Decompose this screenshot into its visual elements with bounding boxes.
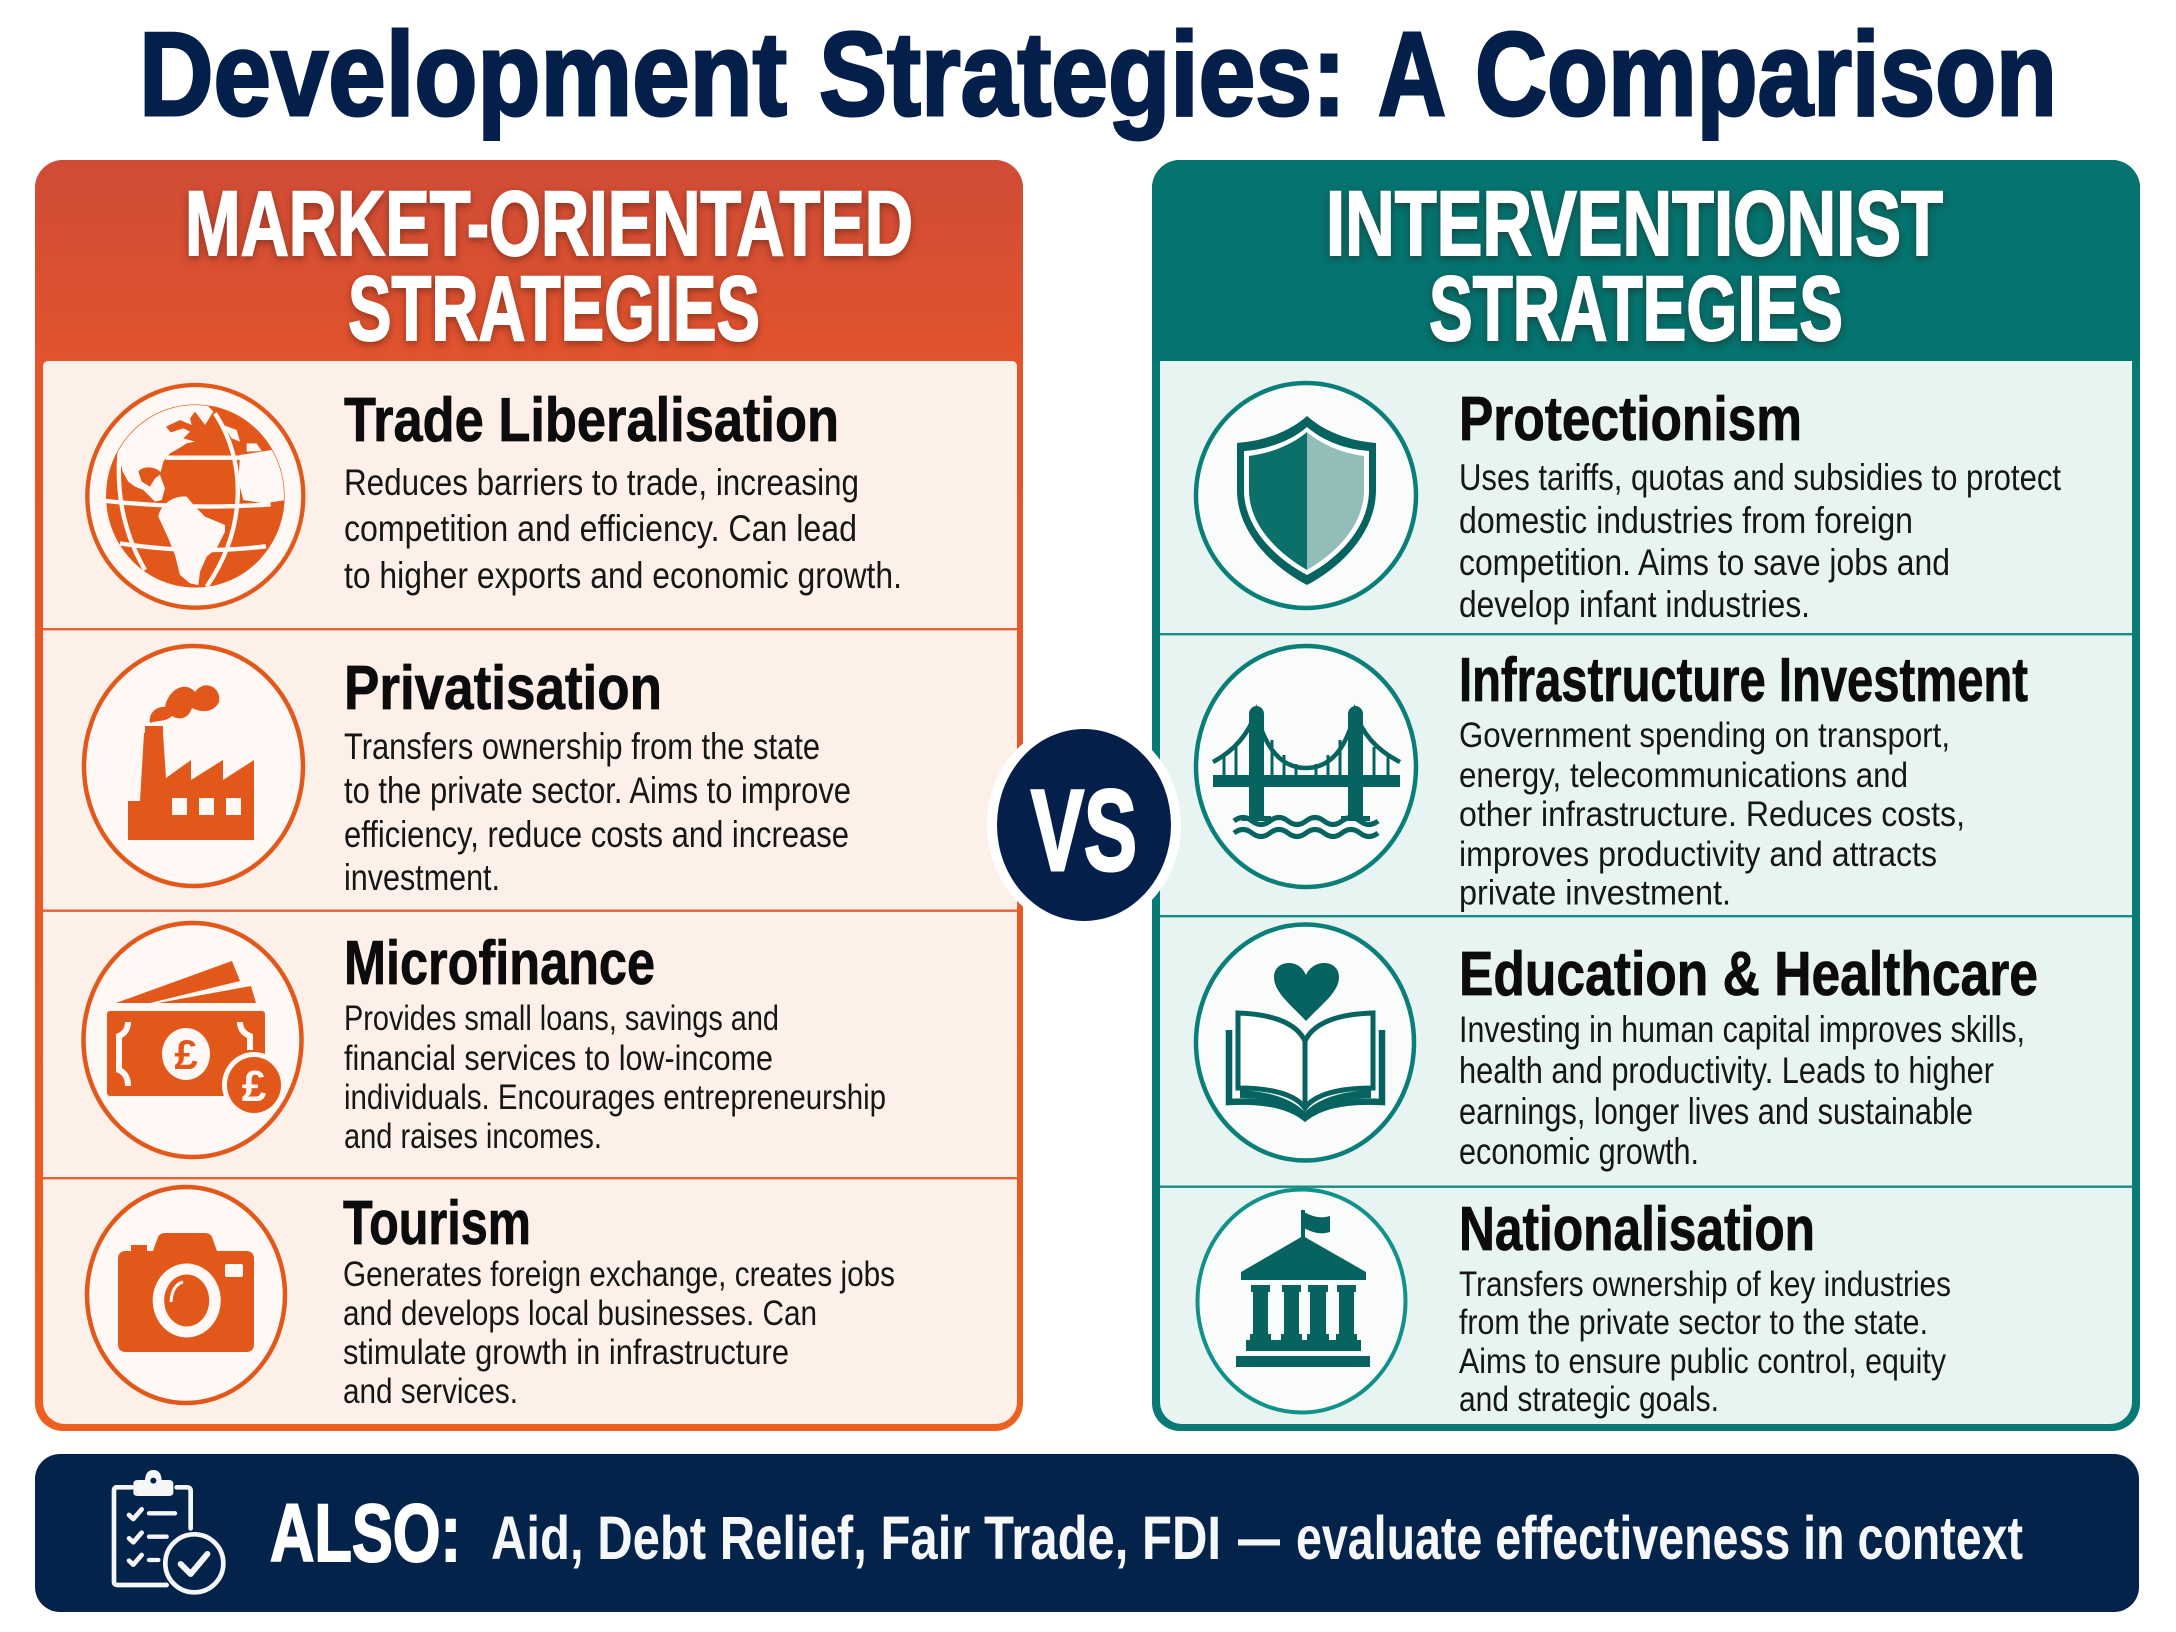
row: trade liberalisation (87, 385, 902, 608)
description: economic growth. (1459, 1131, 1699, 1172)
icon: banknotes and coin (84, 923, 302, 1157)
VS badge (987, 720, 1181, 930)
description: Reduces barriers to trade, increasing (344, 462, 859, 503)
row: nationalisation (1198, 1190, 1951, 1419)
description: Provides small loans, savings and (344, 999, 779, 1038)
title: Strategies: (819, 8, 1346, 141)
description: improves productivity and attracts (1459, 835, 1937, 874)
description: Uses tariffs, quotas and subsidies to protect (1459, 457, 2062, 498)
panel heading: STRATEGIES (348, 258, 760, 360)
description: and raises incomes. (344, 1117, 602, 1156)
icon: shield (1196, 383, 1416, 608)
panel: market-orientated strategies (35, 160, 1023, 1431)
icon: suspension bridge (1196, 646, 1416, 887)
heading: Microfinance (344, 929, 655, 998)
VS badge: VS (1031, 767, 1137, 895)
banner text: — (1238, 1504, 1280, 1572)
description: develop infant industries. (1459, 584, 1810, 625)
heading: Education & Healthcare (1459, 940, 2038, 1009)
icon: clipboard checklist (114, 1470, 223, 1592)
heading: Trade Liberalisation (344, 386, 839, 455)
description (1459, 716, 1965, 912)
description: competition. Aims to save jobs and (1459, 542, 1950, 583)
description (1459, 457, 2062, 625)
panel: interventionist strategies (1152, 160, 2140, 1431)
banner text: Aid, Debt Relief, Fair Trade, FDI (491, 1504, 1221, 1572)
description: from the private sector to the state. (1459, 1303, 1928, 1342)
heading: Privatisation (344, 654, 662, 723)
description: earnings, longer lives and sustainable (1459, 1091, 1973, 1132)
banner text (491, 1504, 2023, 1572)
description: investment. (344, 857, 500, 898)
icon: banknotes and coin: £ (242, 1062, 267, 1111)
description: competition and efficiency. Can lead (344, 508, 857, 549)
panel heading: INTERVENTIONIST (1326, 173, 1943, 275)
description: and services. (343, 1372, 518, 1411)
description (1459, 1265, 1951, 1419)
description: financial services to low-income (344, 1039, 773, 1078)
icon: banknotes and coin: £ (174, 1031, 198, 1078)
description: energy, telecommunications and (1459, 756, 1908, 795)
description: private investment. (1459, 874, 1731, 912)
panel heading: STRATEGIES (1429, 258, 1843, 360)
description (344, 726, 851, 898)
description: other infrastructure. Reduces costs, (1459, 795, 1965, 834)
title: Comparison (1475, 8, 2057, 141)
panel heading (1326, 173, 1943, 360)
description (344, 999, 886, 1156)
description (1459, 1009, 2025, 1172)
panel heading (185, 173, 913, 360)
description: stimulate growth in infrastructure (343, 1333, 789, 1372)
banner label: ALSO: (270, 1488, 461, 1579)
description: individuals. Encourages entrepreneurship (344, 1078, 886, 1117)
heading: Nationalisation (1459, 1195, 1815, 1264)
title: Development (139, 8, 787, 141)
bottom banner (35, 1454, 2139, 1612)
row: education and healthcare (1196, 924, 2038, 1172)
description: Transfers ownership of key industries (1459, 1265, 1951, 1304)
description: Transfers ownership from the state (344, 726, 820, 767)
description: to the private sector. Aims to improve (344, 770, 851, 811)
description: health and productivity. Leads to higher (1459, 1050, 1994, 1091)
description: Aims to ensure public control, equity (1459, 1342, 1946, 1381)
description: and strategic goals. (1459, 1380, 1719, 1419)
description: Generates foreign exchange, creates jobs (343, 1255, 895, 1294)
row: privatisation (84, 646, 851, 898)
row: tourism (87, 1187, 895, 1411)
description (343, 1255, 895, 1411)
row: protectionism (1196, 383, 2062, 625)
description: Government spending on transport, (1459, 716, 1950, 755)
row: microfinance (84, 923, 886, 1157)
heading: Protectionism (1459, 385, 1802, 454)
row: infrastructure investment (1196, 646, 2028, 912)
icon: book and heart (1196, 924, 1414, 1160)
title (139, 8, 2057, 141)
icon: globe (87, 385, 303, 608)
icon: government building (1198, 1190, 1406, 1412)
description: Investing in human capital improves skills, (1459, 1009, 2025, 1050)
description: and develops local businesses. Can (343, 1294, 817, 1333)
description: efficiency, reduce costs and increase (344, 814, 849, 855)
title: A (1378, 8, 1446, 141)
description: to higher exports and economic growth. (344, 555, 902, 596)
heading: Tourism (343, 1189, 531, 1258)
icon: factory (84, 646, 303, 886)
description: domestic industries from foreign (1459, 500, 1913, 541)
panel background (1152, 160, 2140, 1431)
panel background (35, 160, 1023, 1431)
panel heading: MARKET-ORIENTATED (185, 173, 913, 275)
description (344, 462, 902, 596)
icon: camera (87, 1187, 285, 1403)
